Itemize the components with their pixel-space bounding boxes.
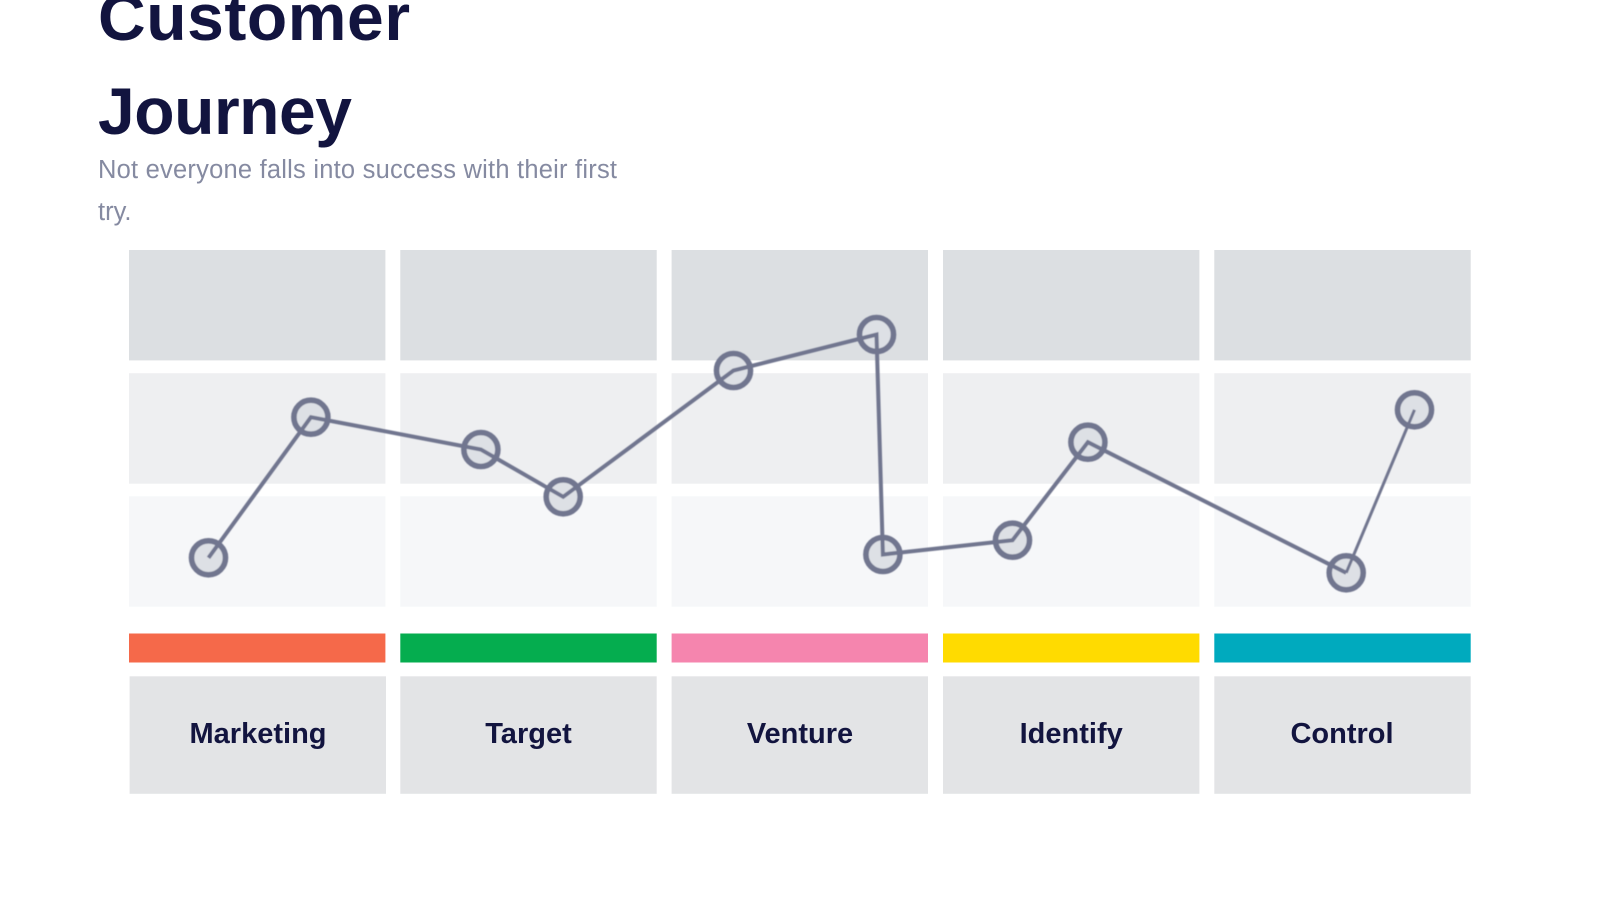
stage label: Control xyxy=(1214,676,1471,794)
title xyxy=(98,0,410,148)
subtitle: try. xyxy=(98,198,132,226)
top row cells xyxy=(129,250,1471,360)
subtitle xyxy=(98,156,617,226)
data point markers xyxy=(192,318,1432,590)
stage label: Target: Target xyxy=(485,718,572,750)
title: Journey xyxy=(98,74,352,148)
bottom row cells xyxy=(129,496,1471,607)
panel: journey grid xyxy=(129,250,1471,607)
stage label: Identify: Identify xyxy=(1020,718,1123,750)
connecting line xyxy=(208,334,1346,573)
stage label: Marketing: Marketing xyxy=(190,718,326,750)
stage label: Control: Control xyxy=(1290,718,1394,750)
stage label: Venture xyxy=(672,676,928,794)
stage label: Marketing xyxy=(130,676,386,794)
stage label: Target xyxy=(400,676,657,794)
chart: journey line xyxy=(192,318,1432,590)
middle row cells xyxy=(129,373,1471,484)
final segment xyxy=(1346,410,1414,573)
subtitle: Not everyone falls into success with their first xyxy=(98,156,617,184)
stage label: Identify xyxy=(943,676,1199,794)
stage label: Venture: Venture xyxy=(747,718,853,750)
colour bars xyxy=(129,634,1471,662)
